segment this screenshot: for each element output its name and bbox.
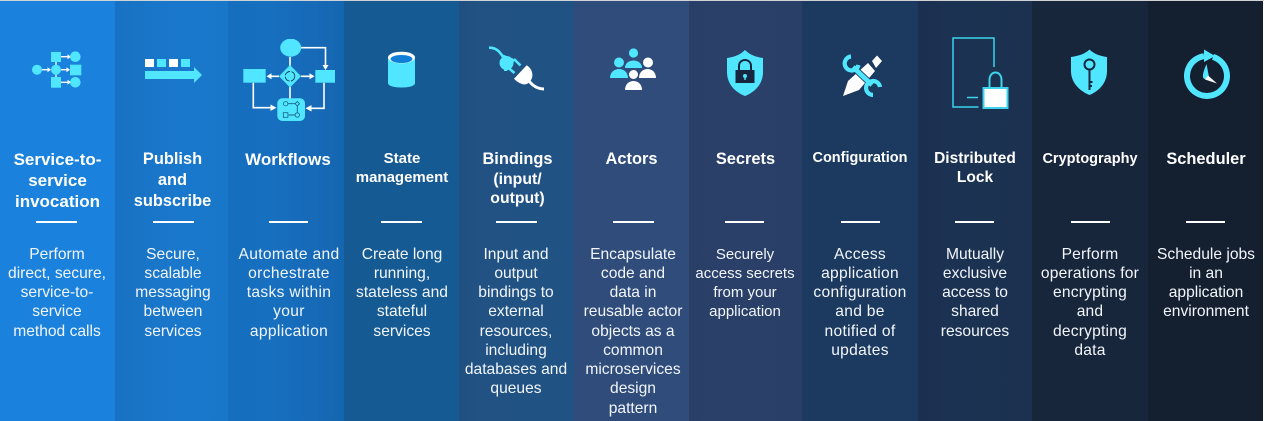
description	[238, 246, 340, 340]
icon: shield with padlock	[727, 50, 763, 96]
panel: cryptography	[1032, 1, 1148, 421]
description	[8, 246, 106, 340]
description: Securely	[716, 246, 774, 262]
icon: service network	[32, 51, 82, 88]
description: messaging	[135, 284, 211, 301]
icon: clock with circular arrow	[1184, 50, 1230, 99]
heading	[934, 150, 1016, 186]
heading: invocation	[15, 192, 100, 210]
divider rule	[613, 221, 654, 223]
description	[813, 246, 907, 359]
description: configuration	[813, 284, 907, 301]
description: service	[32, 303, 82, 320]
description: service-to-	[21, 284, 93, 301]
icon: document with lock	[952, 37, 1008, 109]
description: objects as a	[591, 322, 675, 340]
heading: Cryptography	[1042, 151, 1138, 167]
divider rule	[36, 221, 77, 223]
description: resources	[941, 322, 1009, 340]
description: Perform	[29, 246, 85, 262]
description	[1041, 246, 1139, 359]
description: stateful	[377, 303, 427, 320]
description: Mutually	[946, 246, 1004, 262]
panel: configuration	[802, 1, 918, 421]
divider rule	[955, 221, 994, 223]
description	[135, 246, 211, 340]
heading: subscribe	[134, 192, 211, 210]
panel: service-to-service invocation	[0, 1, 115, 421]
panel: bindings	[459, 1, 574, 421]
description	[1157, 246, 1255, 320]
description: external	[488, 303, 544, 320]
description: microservices	[585, 361, 681, 378]
description: environment	[1163, 303, 1249, 320]
heading: Configuration	[812, 150, 908, 166]
panel: state management	[344, 1, 459, 421]
divider rule	[1186, 221, 1225, 223]
description: Create long	[362, 246, 442, 262]
description: queues	[490, 380, 542, 397]
icon: database cylinder	[388, 52, 415, 88]
panel: distributed lock	[918, 1, 1032, 421]
description: application	[1169, 284, 1243, 301]
panel: scheduler	[1148, 1, 1263, 421]
heading: management	[356, 169, 448, 186]
description	[465, 246, 567, 397]
description: notified of	[825, 322, 895, 340]
description	[584, 246, 682, 416]
description: between	[144, 303, 202, 320]
description: in an	[1189, 265, 1223, 282]
description: exclusive	[943, 265, 1007, 282]
description: services	[144, 322, 202, 340]
heading: and	[158, 170, 187, 188]
description: code and	[601, 265, 665, 282]
description: Input and	[483, 246, 549, 262]
description: operations for	[1041, 265, 1139, 282]
divider rule	[153, 221, 194, 223]
heading	[14, 150, 101, 210]
description: access to	[942, 284, 1008, 301]
heading	[356, 150, 448, 186]
icon: message queue arrow	[145, 59, 202, 83]
heading	[134, 150, 211, 210]
description: pattern	[609, 400, 657, 416]
heading: service	[28, 170, 87, 190]
description: decrypting	[1053, 322, 1127, 340]
description: application	[821, 265, 899, 282]
heading: Scheduler	[1166, 150, 1246, 168]
description: scalable	[144, 265, 202, 282]
description: updates	[831, 342, 889, 359]
description: bindings to	[478, 284, 554, 301]
description	[356, 246, 448, 340]
heading qualifier: (input/	[493, 170, 542, 188]
description: from your	[713, 284, 777, 301]
icon: plug and socket	[489, 46, 544, 90]
divider rule	[496, 221, 537, 223]
divider rule	[269, 221, 308, 223]
panel: workflows	[228, 1, 344, 421]
description: output	[494, 265, 538, 282]
heading: Actors	[606, 150, 657, 168]
divider rule	[1071, 221, 1110, 223]
description: services	[373, 322, 431, 340]
heading: Bindings	[482, 150, 553, 168]
description: orchestrate	[248, 265, 330, 282]
description: common	[603, 342, 663, 359]
description: resources,	[480, 322, 552, 340]
description: stateless and	[356, 284, 448, 301]
description: Access	[834, 246, 886, 262]
heading: Workflows	[245, 150, 331, 168]
description: Schedule jobs	[1157, 246, 1255, 262]
description: Secure,	[146, 246, 200, 262]
icon: shield with key	[1071, 50, 1107, 95]
icon: workflow diagram	[243, 39, 335, 121]
icon: wrench and pencil	[842, 54, 882, 98]
description: access secrets	[695, 265, 795, 282]
description	[695, 246, 795, 320]
description: tasks within	[247, 284, 331, 301]
description: reusable actor	[584, 303, 682, 320]
divider rule	[381, 221, 422, 223]
heading: Secrets	[716, 150, 775, 168]
description: shared	[951, 303, 999, 320]
description: method calls	[13, 322, 101, 340]
divider rule	[841, 221, 880, 223]
description: including	[485, 342, 547, 359]
description: your	[273, 303, 305, 320]
description: databases and	[465, 361, 567, 378]
description: data in	[610, 284, 656, 301]
description: Automate and	[238, 246, 340, 262]
description: and be	[835, 303, 885, 320]
description: and	[1077, 303, 1103, 320]
heading: Lock	[957, 169, 993, 186]
description: application	[709, 303, 781, 320]
description: direct, secure,	[8, 265, 106, 282]
description: running,	[374, 265, 430, 282]
description: encrypting	[1053, 284, 1127, 301]
icon: group of people	[610, 48, 656, 90]
description: data	[1074, 342, 1106, 359]
description: Encapsulate	[590, 246, 676, 262]
heading: Service-to-	[14, 150, 101, 168]
heading qualifier	[490, 170, 545, 206]
description: design	[610, 380, 656, 397]
description	[941, 246, 1009, 340]
panel: secrets	[689, 1, 802, 421]
heading: Publish	[143, 150, 202, 168]
heading: State	[384, 150, 420, 167]
panel: actors	[574, 1, 689, 421]
heading qualifier: output)	[490, 190, 545, 206]
panel: publish and subscribe	[115, 1, 228, 421]
divider rule	[725, 221, 764, 223]
heading: Distributed	[934, 150, 1016, 167]
description: application	[250, 322, 328, 340]
description: Perform	[1062, 246, 1118, 262]
